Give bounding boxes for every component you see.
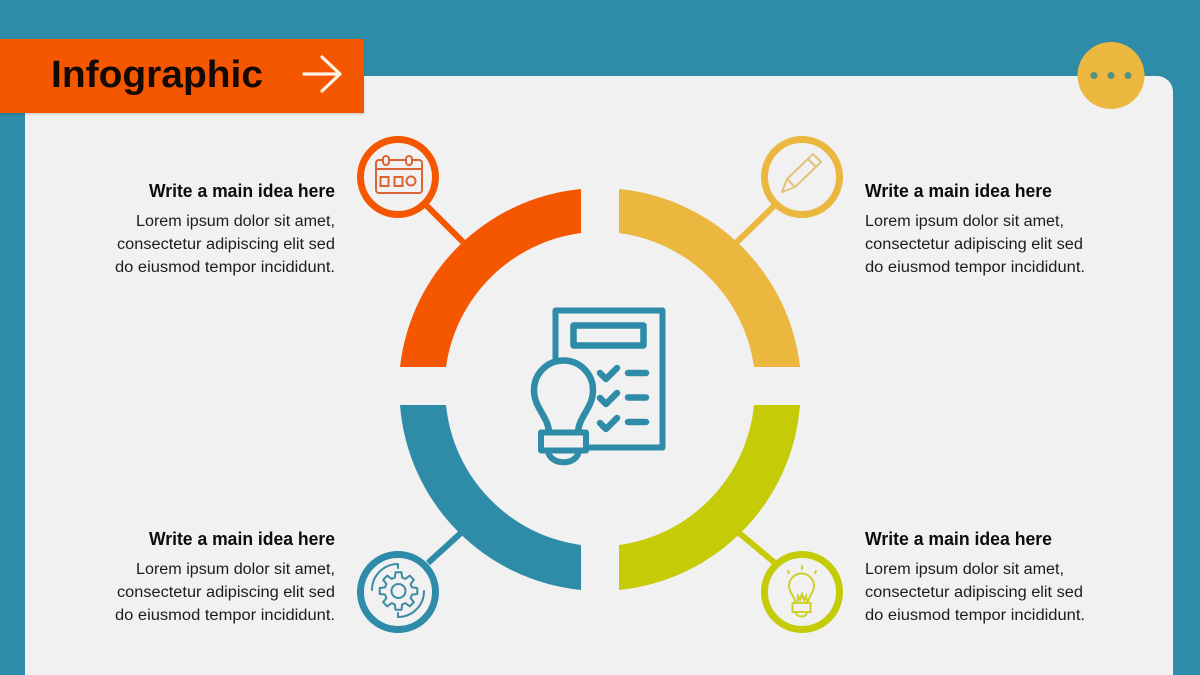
topic: top right: [737, 140, 1085, 276]
ring segment: lime: [619, 405, 800, 590]
text: bottom right: Lorem ipsum dolor sit amet,: [865, 561, 1064, 578]
connector: teal: [428, 532, 462, 563]
icon badge: gear: [360, 554, 436, 630]
text: top left: [115, 181, 335, 276]
icon: arrow: [304, 57, 340, 91]
text: bottom left: Write a main idea here: [149, 529, 335, 549]
ring segment: yellow: [619, 189, 800, 367]
topic: bottom right: [738, 529, 1085, 630]
text: top right: Write a main idea here: [865, 181, 1052, 201]
text: top right: Lorem ipsum dolor sit amet,: [865, 213, 1064, 230]
text: top right: consectetur adipiscing elit sed: [865, 236, 1083, 253]
text: top left: do eiusmod tempor incididunt.: [115, 259, 335, 276]
icon badge: light bulb: [764, 554, 840, 630]
connector: yellow: [737, 205, 775, 242]
text: bottom left: [115, 529, 335, 624]
topic: bottom left: [115, 529, 462, 630]
icon: central checklist with light bulb: [534, 310, 662, 462]
text: top left: Lorem ipsum dolor sit amet,: [136, 213, 335, 230]
text: top left: Write a main idea here: [149, 181, 335, 201]
text: bottom left: consectetur adipiscing elit sed: [117, 584, 335, 601]
menu button: [1078, 42, 1144, 109]
text: top right: do eiusmod tempor incididunt.: [865, 259, 1085, 276]
text: bottom right: do eiusmod tempor incididunt.: [865, 607, 1085, 624]
text: top left: consectetur adipiscing elit sed: [117, 236, 335, 253]
ring segment: orange: [400, 189, 581, 367]
icon badge: pencil: [764, 140, 840, 214]
title: Infographic: [51, 54, 263, 96]
text: bottom right: Write a main idea here: [865, 529, 1052, 549]
text: bottom left: do eiusmod tempor incididunt.: [115, 607, 335, 624]
icon badge: calendar: [360, 140, 436, 214]
text: bottom right: consectetur adipiscing elit sed: [865, 584, 1083, 601]
topic: top left: [115, 140, 463, 276]
ring segment: teal: [400, 405, 581, 590]
title banner: [0, 39, 364, 113]
connector: orange: [426, 205, 463, 242]
text: bottom left: Lorem ipsum dolor sit amet,: [136, 561, 335, 578]
text: bottom right: [865, 529, 1085, 624]
connector: lime: [738, 532, 775, 563]
text: top right: [865, 181, 1085, 276]
